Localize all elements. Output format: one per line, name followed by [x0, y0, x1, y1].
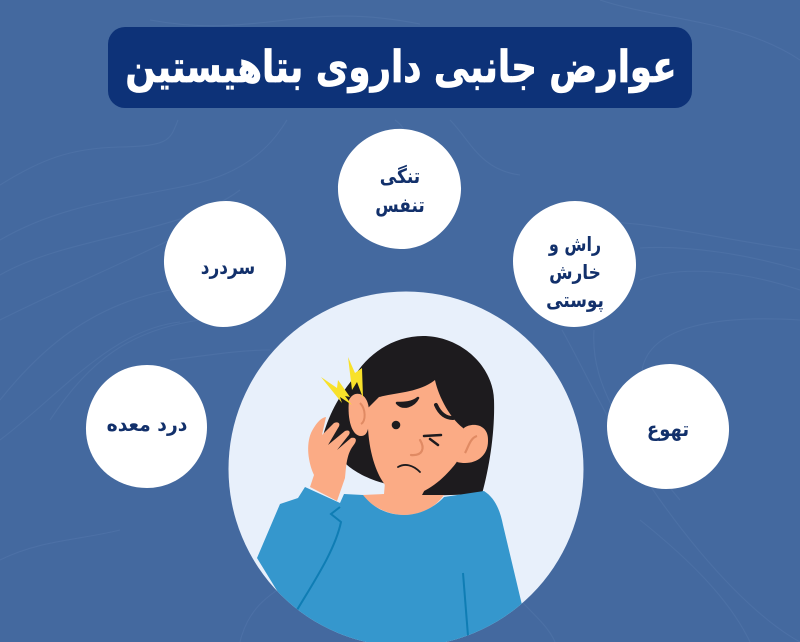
- title: [108, 27, 692, 108]
- illustration circle: [228, 292, 584, 642]
- nose and mouth: [411, 440, 423, 455]
- title: عوارض جانبی داروی بتاهیستین: [125, 42, 677, 93]
- label: tangi: تنگی: [380, 165, 420, 188]
- right ear: [457, 425, 488, 463]
- label: itching: خارش: [549, 262, 601, 284]
- left ear: [349, 394, 369, 436]
- bubble: stomach pain: [86, 365, 207, 488]
- bubble: shortness of breath: [338, 129, 461, 249]
- lightning bolts: [321, 377, 352, 405]
- bubble: nausea: [607, 364, 729, 489]
- sweater folds: [297, 507, 468, 636]
- sweater: [257, 487, 522, 642]
- bubble: headache: [164, 201, 286, 327]
- bubble: headache: سردرد: [201, 257, 255, 279]
- bubble: stomach pain: درد معده: [107, 412, 187, 436]
- hair: [322, 336, 494, 496]
- label: skin: پوستی: [546, 290, 604, 312]
- bubble: nausea: تهوع: [647, 418, 689, 441]
- bubble: rash and itching: [513, 201, 636, 327]
- label: tanaffos: تنفس: [375, 195, 425, 217]
- neck: [363, 484, 444, 515]
- brows and eyes: [397, 398, 418, 407]
- hand: [308, 417, 356, 501]
- label: rash: راش و: [548, 233, 601, 257]
- face: [368, 380, 466, 497]
